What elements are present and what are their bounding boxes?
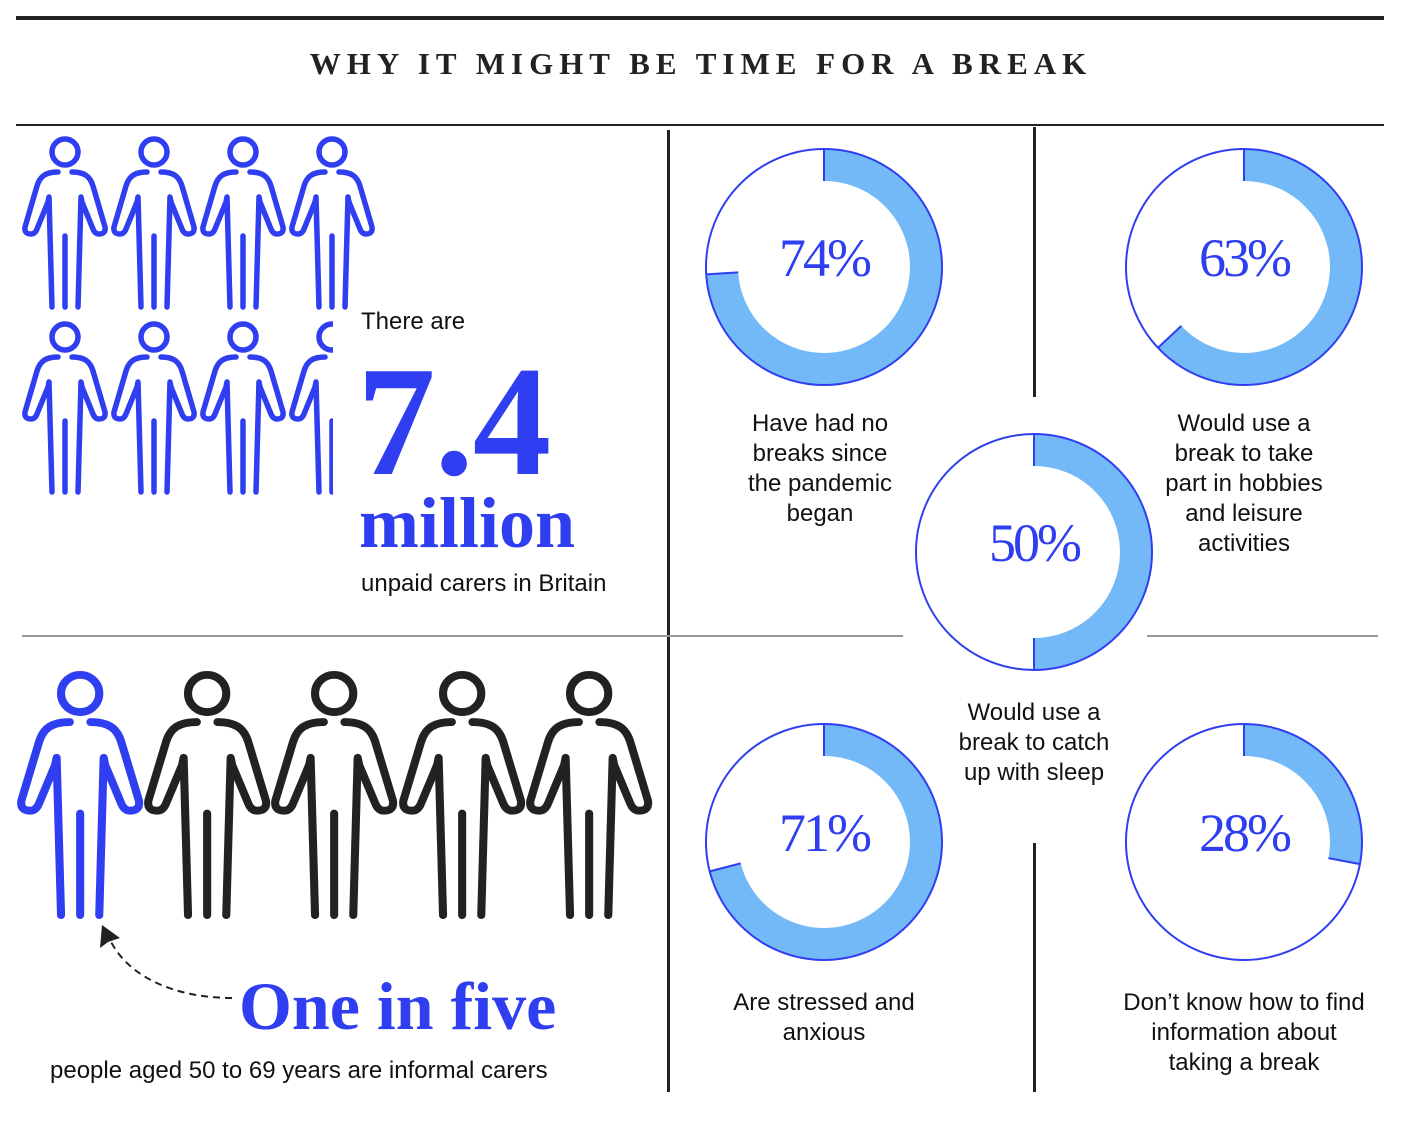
text: 50%	[989, 513, 1079, 573]
text: anxious	[783, 1019, 865, 1046]
percent labels: 74%	[779, 228, 869, 288]
donut captions	[748, 410, 892, 527]
stat: million: million	[359, 483, 575, 563]
text: Would use a	[968, 699, 1100, 726]
icon: one in five people	[21, 675, 648, 915]
text: Don’t know how to find	[1123, 989, 1365, 1016]
text: 28%	[1199, 803, 1289, 863]
text: there are: There are	[361, 308, 465, 335]
stat: 7.4: 7.4	[357, 334, 550, 508]
donut: 28%	[1126, 724, 1362, 960]
text: unpaid carers: unpaid carers in Britain	[361, 570, 606, 597]
donut captions: began	[787, 500, 853, 527]
donut captions: the pandemic	[748, 470, 892, 497]
title: WHY IT MIGHT BE TIME FOR A BREAK	[310, 46, 1092, 81]
arrow: dashed pointer	[100, 925, 232, 998]
text: and leisure	[1185, 500, 1303, 527]
text: activities	[1198, 530, 1290, 557]
text: 71%	[779, 803, 869, 863]
text: Would use a	[1178, 410, 1310, 437]
donut: 63%	[1126, 149, 1362, 385]
text: information about	[1151, 1019, 1337, 1046]
donut captions: breaks since	[753, 440, 887, 467]
text: people aged: people aged 50 to 69 years are informal carers	[50, 1057, 548, 1084]
donut captions: Have had no	[752, 410, 888, 437]
icon: people grid 7.4 million	[25, 139, 372, 492]
donut: 50%	[916, 434, 1152, 670]
text: taking a break	[1169, 1049, 1319, 1076]
text: break to catch	[959, 729, 1109, 756]
stat: one in five: One in five	[239, 968, 556, 1044]
donut: 71%	[706, 724, 942, 960]
text: break to take	[1175, 440, 1313, 467]
text: Are stressed and	[733, 989, 915, 1016]
text: part in hobbies	[1165, 470, 1323, 497]
donut: 74%	[706, 149, 942, 385]
text: up with sleep	[964, 759, 1104, 786]
text: 63%	[1199, 228, 1289, 288]
